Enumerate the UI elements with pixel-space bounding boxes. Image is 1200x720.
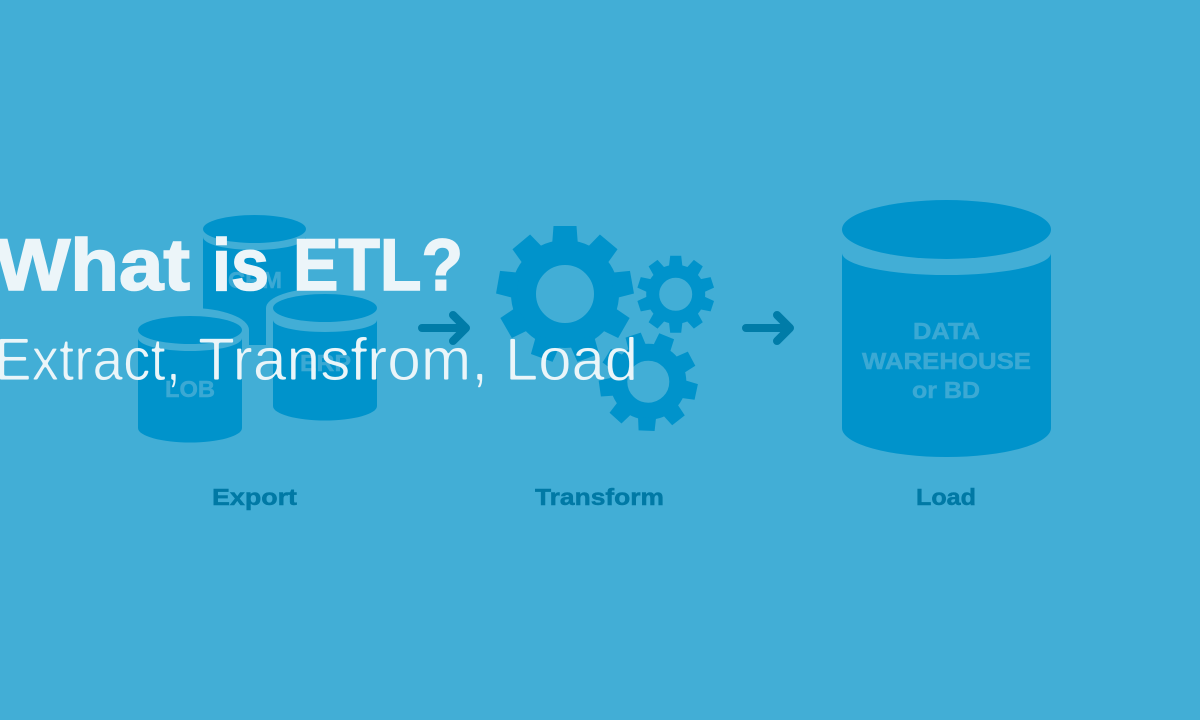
warehouse label: WAREHOUSE [862, 348, 1031, 374]
label: Export: Export [212, 484, 297, 510]
icon: source databases [131, 215, 384, 450]
gear: large [496, 226, 634, 362]
warehouse label: DATA [913, 318, 980, 344]
cylinder: LOB: LOB [165, 376, 215, 402]
subtitle: Extract, [0, 326, 181, 393]
cylinder: CRM: CRM [228, 267, 282, 293]
cylinder: ERP: ERP [300, 350, 351, 376]
warehouse label [862, 318, 1031, 403]
arrow: transform to load [746, 315, 790, 341]
icon: data warehouse cylinder [842, 200, 1051, 457]
title [0, 225, 463, 306]
subtitle [0, 326, 638, 393]
warehouse label: or BD [912, 377, 980, 403]
label: Load: Load [916, 484, 976, 510]
cylinder: ERP [266, 288, 384, 430]
cylinder: CRM [203, 215, 306, 345]
arrow: export to transform [422, 315, 466, 341]
cylinder: LOB [131, 308, 249, 450]
gear: medium bottom [599, 332, 698, 431]
title: is [212, 225, 269, 306]
subtitle: Transfrom, [198, 326, 488, 393]
subtitle: Load [505, 326, 638, 393]
title: What [0, 225, 190, 306]
gear: small right [637, 256, 714, 333]
icon: gears [496, 226, 714, 431]
title: ETL? [293, 225, 463, 306]
label: Transform: Transform [535, 484, 664, 510]
